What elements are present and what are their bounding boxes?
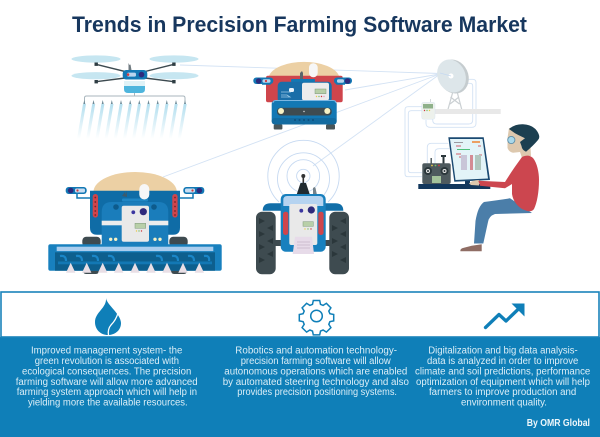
text: improved management: green revolution is associated with [35, 356, 179, 367]
text: digitalization: environment quality. [461, 398, 547, 409]
text: robotics: by automated steering technology and also [223, 377, 409, 388]
text: digitalization: data is analyzed in order to improve [427, 356, 579, 367]
torso and arm [478, 156, 539, 211]
screen bars [461, 155, 481, 170]
signal rings [268, 140, 339, 202]
tractor: rear view top [253, 62, 352, 130]
text: improved management: farming system approach which will help in [17, 387, 197, 398]
axle [272, 240, 332, 246]
text: digitalization [415, 346, 591, 409]
glasses [508, 136, 515, 144]
person [460, 124, 539, 251]
combine body [90, 191, 180, 235]
printer [293, 237, 314, 254]
antenna [302, 176, 304, 184]
text: digitalization: farmers to improve production and [429, 387, 576, 398]
text: improved management [16, 346, 198, 409]
fenders [263, 203, 343, 211]
text: robotics: precision farming software will allow [241, 356, 391, 367]
text: improved management: farming software will allow more advanced [16, 377, 198, 388]
combine header [48, 244, 222, 271]
bottom panel [0, 292, 600, 437]
combine sensors [77, 194, 193, 198]
hand [469, 180, 479, 186]
text: robotics [223, 346, 409, 398]
cables [405, 79, 476, 177]
combine wheels [82, 237, 101, 247]
combine spikes [66, 263, 204, 273]
shoe [460, 244, 482, 251]
text: robotics: autonomous operations which are enabled [224, 366, 407, 377]
tractor body [281, 194, 326, 252]
screen widgets [454, 142, 482, 157]
text: digitalization: optimization of equipment which will help [416, 377, 590, 388]
text: digitalization: climate and soil predictions, performance [415, 366, 591, 377]
title: Trends in Precision Farming Software Market [72, 12, 528, 37]
face and neck [508, 128, 531, 158]
icon: water drop [95, 298, 121, 336]
shelf [430, 109, 501, 114]
source credit: By OMR Global [527, 418, 590, 429]
autonomous tractor [256, 140, 349, 274]
remote controller [422, 155, 451, 184]
text: digitalization: Digitalization and big data analysis- [428, 346, 578, 356]
satellite dish [432, 54, 474, 109]
text: robotics: Robotics and automation technology- [235, 346, 397, 356]
hair [509, 124, 539, 152]
text: improved management: ecological consequences. The precision [22, 366, 191, 377]
monitor [448, 137, 490, 184]
text: improved management: Improved management system- the [31, 346, 183, 356]
drone rotors [72, 55, 198, 79]
wall device [422, 99, 435, 119]
wheels [256, 212, 276, 274]
text: improved management: yielding more the available resources. [28, 398, 188, 409]
drone boom [84, 93, 185, 103]
combine harvester [48, 172, 222, 274]
tractor front [272, 100, 337, 124]
drone [72, 55, 198, 139]
signal lines [163, 65, 440, 177]
sensor arms [262, 80, 345, 84]
icon: trend arrow [486, 304, 524, 328]
legs [474, 198, 532, 244]
text: robotics: provides precision positioning systems. [237, 387, 397, 398]
desk [418, 184, 490, 189]
drone tank [124, 81, 145, 93]
icon: gear [299, 300, 334, 335]
spray [77, 104, 187, 139]
